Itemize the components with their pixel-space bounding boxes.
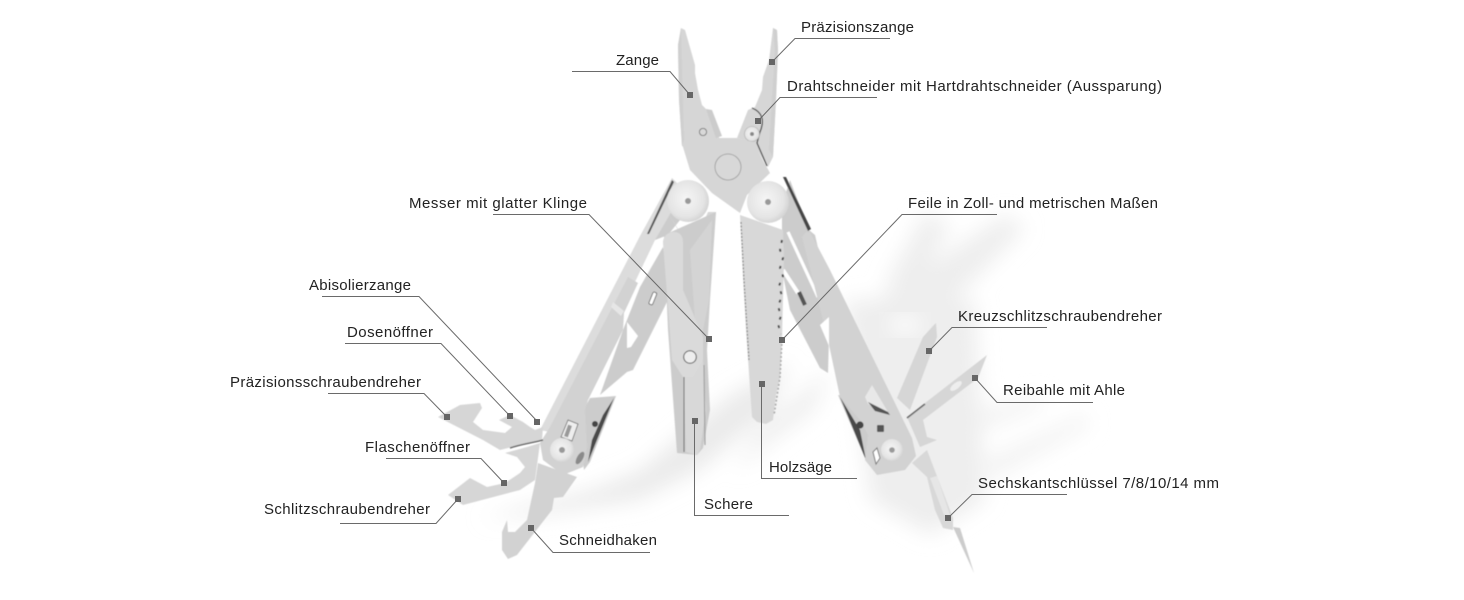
multitool illustration (438, 28, 987, 573)
latch (561, 420, 578, 441)
cutting hook (502, 463, 577, 559)
reamer with awl (907, 355, 987, 447)
hex key (912, 450, 953, 530)
highlight in shadow (889, 317, 921, 333)
centre blades: knife and scissors (663, 212, 716, 455)
left roller (667, 180, 709, 222)
soft cast shadow behind the tool (480, 212, 1090, 535)
left jaw: pliers (678, 28, 722, 152)
saw teeth (778, 240, 783, 334)
bolt (881, 439, 903, 461)
bottle opener and flat screwdriver (448, 443, 540, 505)
callout: Präzisionszange: Präzisionszange (801, 19, 914, 36)
callout: Präzisionszange (769, 19, 914, 65)
left handle assembly (540, 178, 692, 475)
callout: Schere: Schere (704, 496, 753, 513)
callout: Zange (572, 52, 693, 98)
right back plate: file (782, 180, 830, 373)
callout: Reibahle mit Ahle: Reibahle mit Ahle (1003, 382, 1125, 399)
right roller (747, 181, 789, 223)
right jaw: needle-nose with wire cutter (737, 28, 778, 167)
callout: Präzisionsschraubendreher (230, 374, 450, 420)
callout: Abisolierzange: Abisolierzange (309, 277, 411, 294)
callout: Sechskantschlüssel: Sechskantschlüssel 7/8/10/14 mm (978, 475, 1219, 492)
callout: Drahtschneider: Drahtschneider mit Hartdrahtschneider (Aussparung) (787, 78, 1162, 95)
right handle assembly (783, 177, 916, 475)
phillips screwdriver (897, 323, 937, 410)
left fold-out tools (438, 403, 577, 559)
callout: Kreuzschlitzschraubendreher (926, 308, 1162, 354)
callout: Abisolierzange (309, 277, 540, 425)
callout: Schneidhaken: Schneidhaken (559, 532, 657, 549)
callout: Reibahle mit Ahle (972, 375, 1125, 402)
callout: Dosenöffner: Dosenöffner (347, 324, 433, 341)
callout: Schlitzschraubendreher (264, 496, 461, 524)
callout: Messer: Messer mit glatter Klinge (409, 195, 587, 212)
callout: Feile: Feile in Zoll- und metrischen Maßen (908, 195, 1158, 212)
callout: Kreuzschlitzschraubendreher: Kreuzschlitzschraubendreher (958, 308, 1162, 325)
callout: Holzsäge (759, 381, 857, 478)
callout: Sechskantschlüssel (945, 475, 1219, 521)
folded-out tools on the right (897, 323, 987, 573)
callout: Schlitzschraubendreher: Schlitzschraubendreher (264, 501, 430, 518)
bolt (550, 438, 574, 462)
back plate (600, 247, 670, 395)
wood saw blade (740, 215, 784, 424)
precision screwdriver and can opener (438, 403, 543, 450)
callout: Feile (779, 195, 1158, 343)
central pivot plate and rollers (667, 138, 789, 223)
callout: Präzisionsschraubendreher: Präzisionsschraubendreher (230, 374, 421, 391)
roller side plate (655, 178, 692, 240)
callout: Zange: Zange (616, 52, 659, 69)
callout: Flaschenöffner: Flaschenöffner (365, 439, 470, 456)
callout: Flaschenöffner (365, 439, 507, 486)
callout: Schneidhaken (528, 525, 657, 552)
callout: Messer (409, 195, 712, 342)
callout: Dosenöffner (345, 324, 513, 419)
lower side plate (578, 396, 616, 470)
main handle (540, 277, 638, 475)
callout: Holzsäge: Holzsäge (769, 459, 832, 476)
callout: Schere (692, 418, 789, 516)
callout: Drahtschneider (755, 78, 1162, 124)
outer frame band (540, 178, 684, 432)
